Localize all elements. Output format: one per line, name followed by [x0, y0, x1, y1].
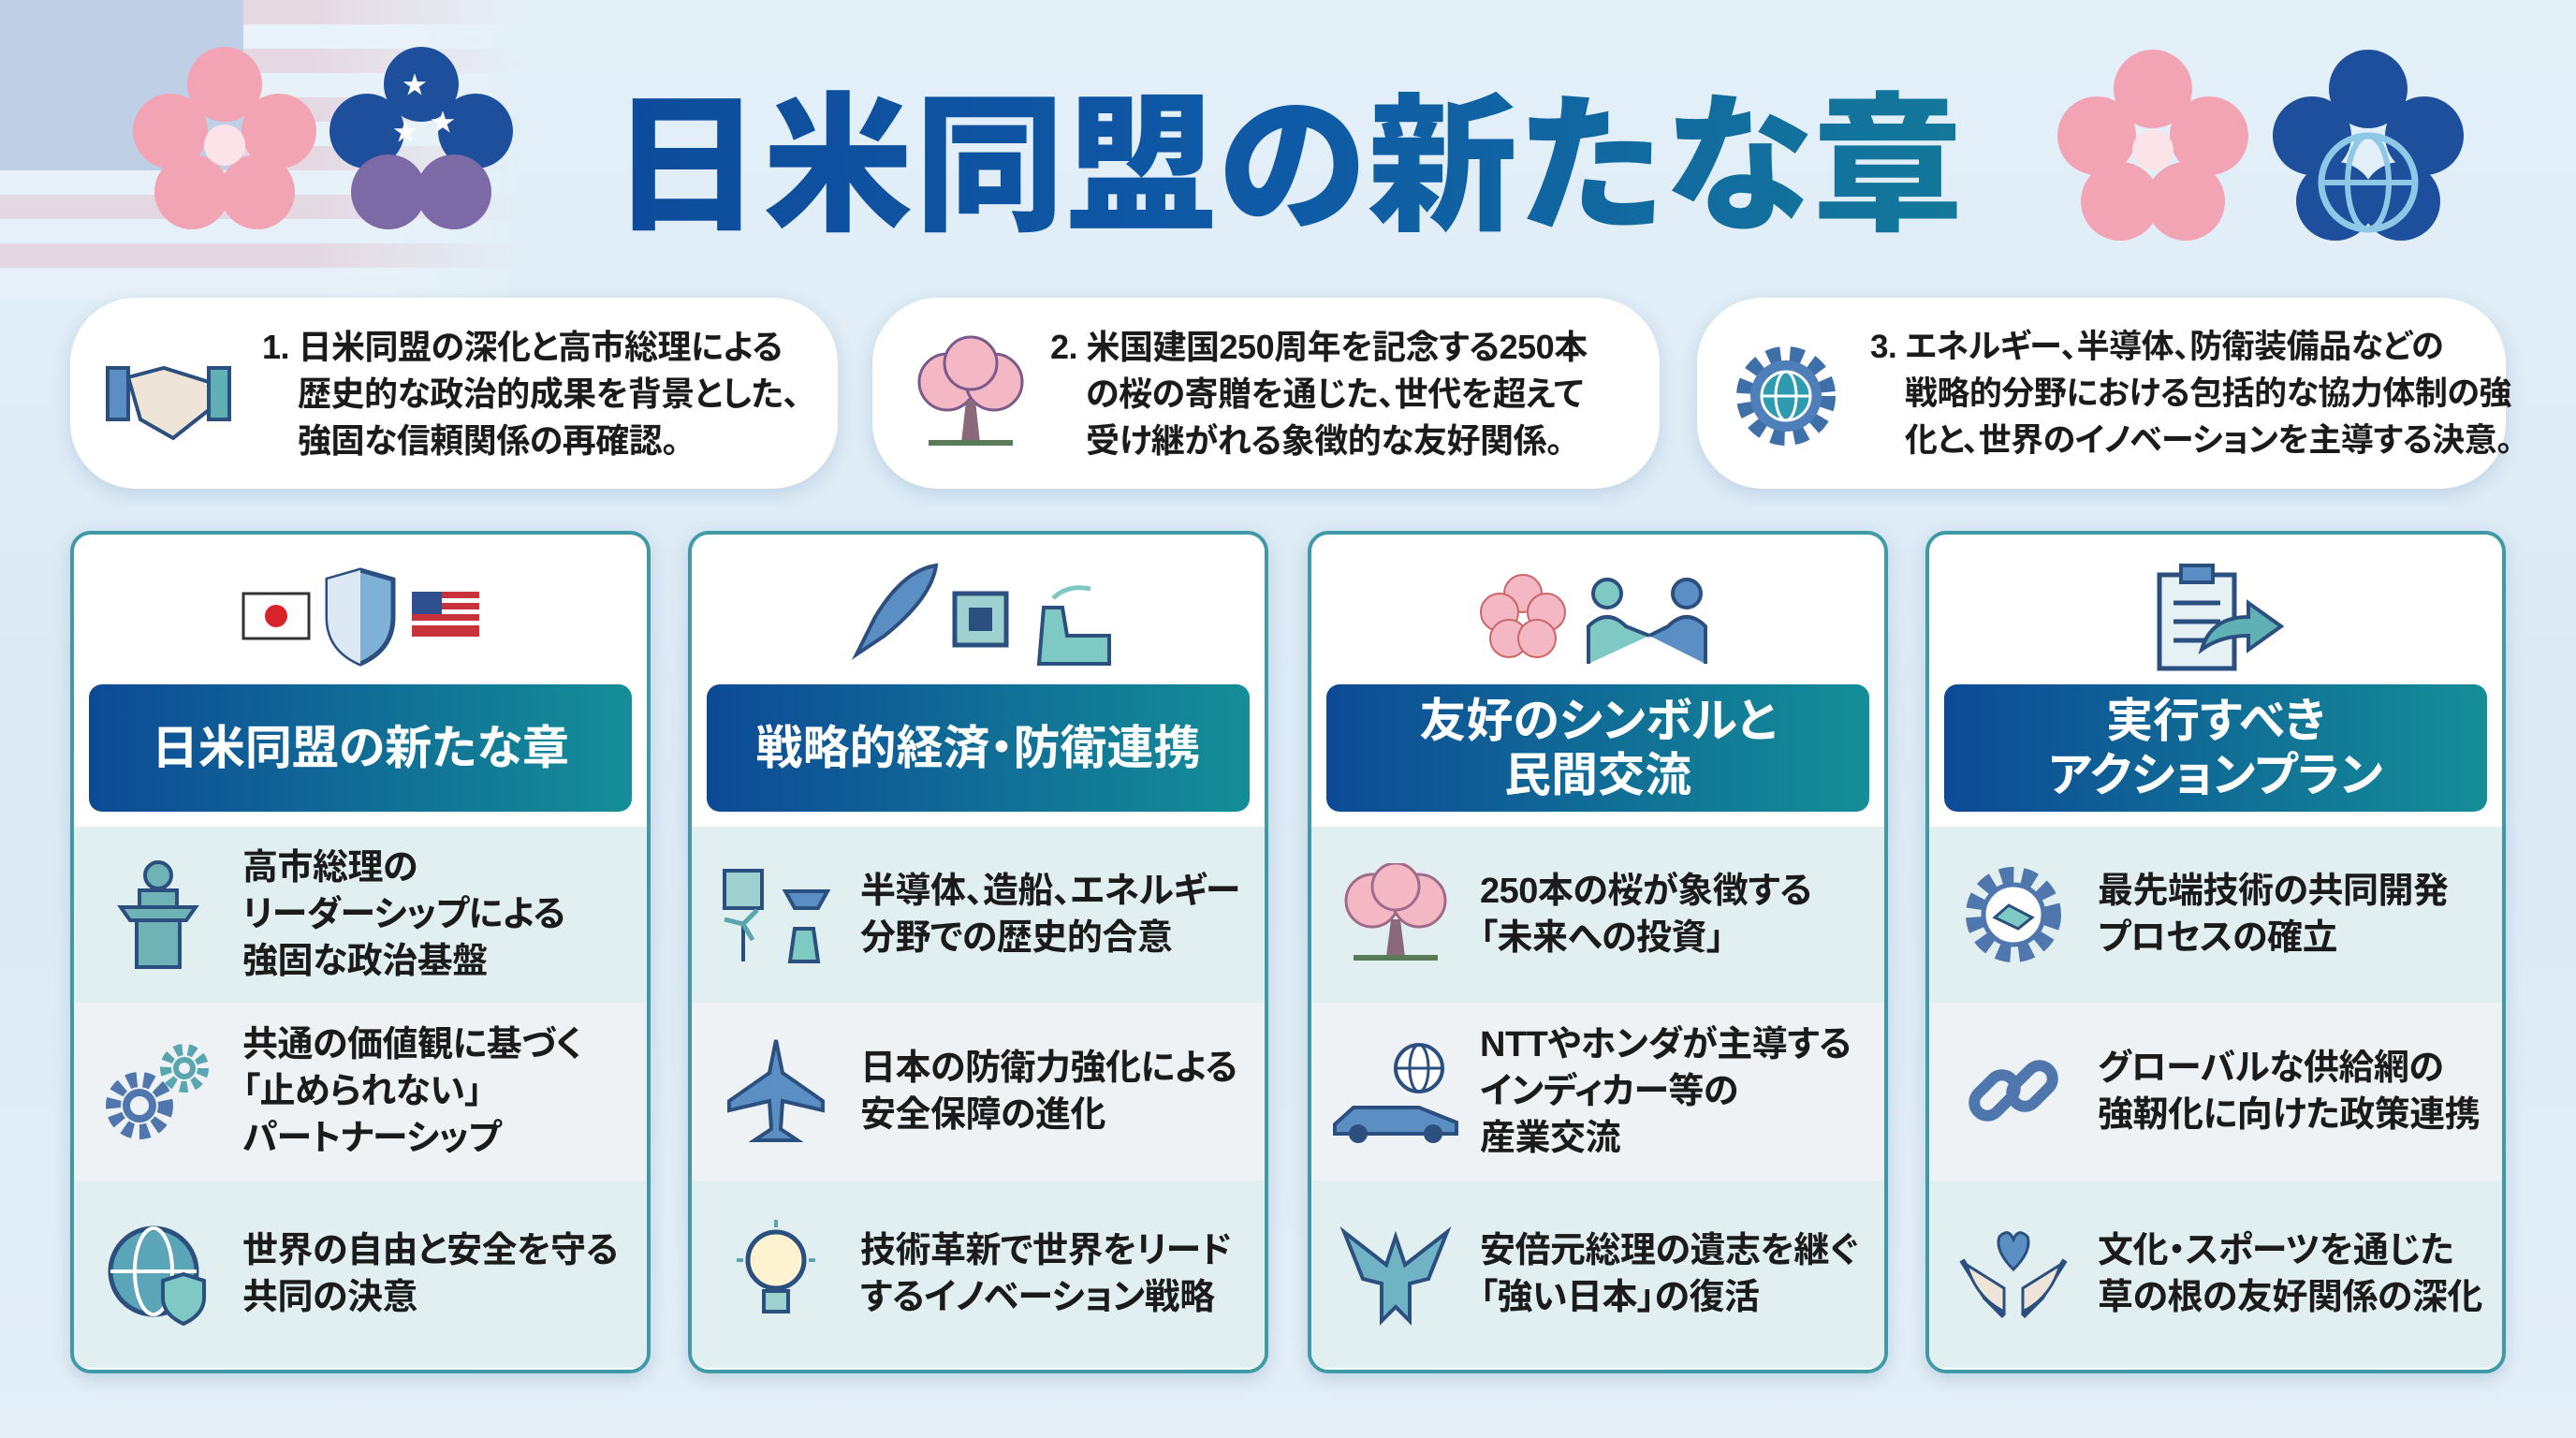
- icon: handshake: [106, 365, 231, 440]
- item: 高市総理の: [242, 848, 417, 888]
- icon: sakura right: [2057, 50, 2464, 241]
- panel: card 3: [1308, 531, 1888, 1373]
- pill 3: 3. エネルギー、半導体、防衛装備品などの: [1870, 329, 2443, 365]
- item: [74, 1003, 647, 1181]
- pill 3: 戦略的分野における包括的な協力体制の強: [1905, 375, 2511, 412]
- item: [1311, 1181, 1884, 1368]
- item: [1929, 1181, 2502, 1368]
- icon: clipboard arrow: [2157, 564, 2284, 670]
- heading: 戦略的経済・防衛連携: [756, 722, 1200, 774]
- heading: [89, 684, 632, 812]
- item: グローバルな供給網の: [2098, 1049, 2443, 1088]
- title: 日米同盟の新たな章: [611, 82, 1965, 250]
- item: 世界の自由と安全を守る: [242, 1231, 618, 1270]
- panel: card 4: [1925, 531, 2506, 1373]
- item: [1311, 827, 1884, 1003]
- item: リーダーシップによる: [242, 895, 565, 934]
- panel: card 1: [70, 531, 651, 1373]
- item: 強固な政治基盤: [242, 942, 488, 981]
- title: [0, 73, 2576, 260]
- item: 産業交流: [1480, 1119, 1620, 1158]
- heading: 友好のシンボルと: [1419, 695, 1777, 747]
- icon: flags and shield: [242, 567, 479, 667]
- item: 「未来への投資」: [1480, 918, 1724, 958]
- item: するイノベーション戦略: [860, 1278, 1215, 1317]
- heading: 実行すべき: [2106, 695, 2325, 747]
- item: 最先端技術の共同開発: [2098, 872, 2448, 911]
- item: 日本の防衛力強化による: [860, 1049, 1237, 1088]
- heading: 日米同盟の新たな章: [152, 722, 569, 774]
- heading: [1326, 684, 1869, 812]
- icon: sakura left: ★: [402, 71, 427, 99]
- icon: sakura left: ★: [431, 109, 455, 137]
- item: 安全保障の進化: [860, 1095, 1105, 1135]
- item: 250本の桜が象徴する: [1480, 872, 1811, 911]
- item: パートナーシップ: [242, 1119, 501, 1158]
- heading: [1944, 684, 2487, 812]
- item: [74, 1181, 647, 1368]
- item: 草の根の友好関係の深化: [2098, 1278, 2482, 1317]
- item: 半導体、造船、エネルギー: [860, 872, 1240, 911]
- pill 3: 化と、世界のイノベーションを主導する決意。: [1905, 422, 2512, 459]
- item: [74, 827, 647, 1003]
- item: 「止められない」: [242, 1072, 482, 1111]
- item: NTTやホンダが主導する: [1480, 1025, 1851, 1064]
- pill 1: 強固な信頼関係の再確認。: [298, 421, 679, 460]
- pill 2: 受け継がれる象徴的な友好関係。: [1086, 421, 1563, 460]
- item: [692, 1003, 1265, 1181]
- item: インディカー等の: [1480, 1072, 1738, 1111]
- item: 共通の価値観に基づく: [242, 1025, 581, 1064]
- icon: sakura left: [133, 47, 513, 229]
- pill 1: 歴史的な政治的成果を背景とした、: [298, 374, 799, 413]
- icon: cherry tree: [917, 335, 1024, 446]
- item: 文化・スポーツを通じた: [2098, 1231, 2453, 1270]
- item: [1929, 1003, 2502, 1181]
- item: 分野での歴史的合意: [860, 918, 1172, 958]
- pill 2: の桜の寄贈を通じた、世代を超えて: [1086, 374, 1583, 413]
- icon: rocket chip factory: [852, 564, 1111, 666]
- item: 強靭化に向けた政策連携: [2098, 1095, 2480, 1135]
- item: [1929, 827, 2502, 1003]
- icon: gear globe: [1736, 346, 1836, 446]
- item: 「強い日本」の復活: [1480, 1278, 1759, 1317]
- item: [692, 1181, 1265, 1368]
- pill 2: 2. 米国建国250周年を記念する250本: [1050, 328, 1588, 366]
- heading: アクションプラン: [2048, 749, 2383, 801]
- item: 共同の決意: [242, 1278, 417, 1317]
- icon: sakura left: ★: [393, 118, 417, 146]
- pill 1: [70, 298, 838, 489]
- heading: [707, 684, 1250, 812]
- item: 安倍元総理の遺志を継ぐ: [1480, 1231, 1857, 1270]
- pill 3: [1697, 298, 2506, 489]
- item: [692, 827, 1265, 1003]
- item: プロセスの確立: [2098, 918, 2337, 958]
- pill 2: [872, 298, 1660, 489]
- panel: card 2: [688, 531, 1268, 1373]
- item: [1311, 1003, 1884, 1181]
- heading: 民間交流: [1504, 749, 1691, 801]
- pill 1: 1. 日米同盟の深化と高市総理による: [262, 328, 783, 366]
- decorative flag background top-left: [0, 0, 440, 268]
- item: 技術革新で世界をリード: [860, 1231, 1231, 1270]
- icon: sakura and people: [1480, 574, 1707, 664]
